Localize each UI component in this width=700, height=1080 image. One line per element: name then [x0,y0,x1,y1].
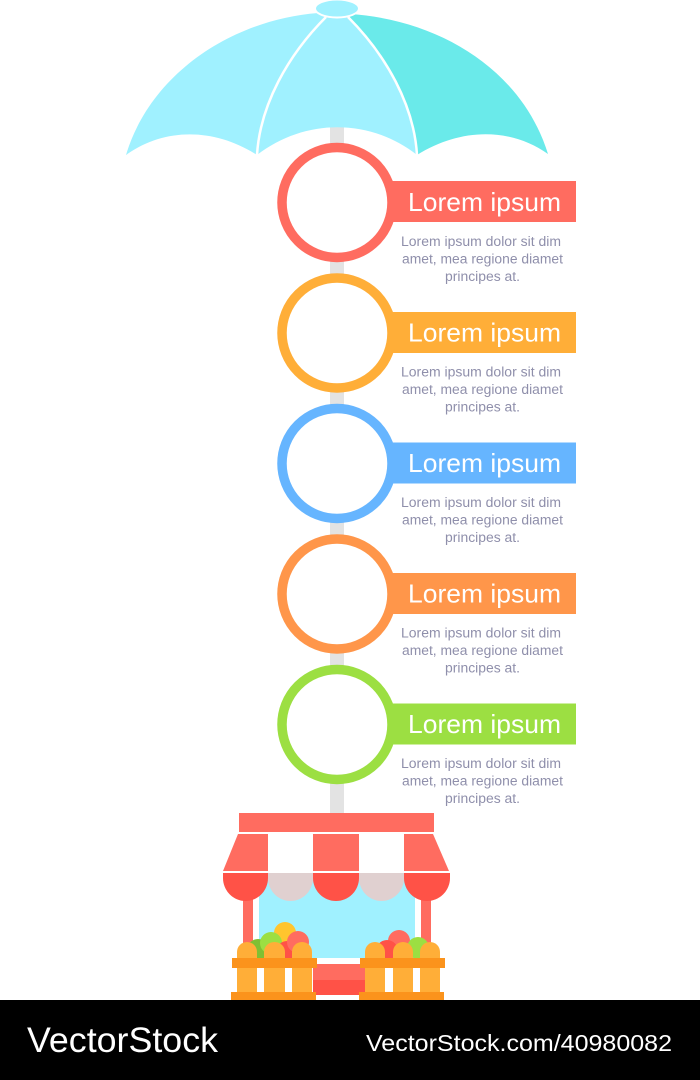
umbrella pole [330,125,344,815]
step 3 [282,408,576,545]
canopy left and middle panels [126,13,417,155]
canopy right panel [348,14,548,155]
canopy cap [315,0,359,18]
step 5 [282,670,576,806]
step 2 heading: Lorem ipsum [408,318,561,348]
step 4 description: principes at. [445,660,520,676]
step 3 description: amet, mea regione diamet [402,512,563,528]
step 2 description: amet, mea regione diamet [402,382,563,397]
step 1 description: amet, mea regione diamet [402,252,563,266]
step 3 description [401,495,563,545]
step 3 ring [282,408,392,518]
icon: market stall [223,813,450,1000]
left fruit pile [247,922,309,963]
step 4 ring [282,539,392,649]
step 2 banner [380,312,576,353]
step [313,964,365,995]
step 4 description: Lorem ipsum dolor sit dim [401,626,561,640]
step 1 ring [282,148,392,258]
step 1 description: Lorem ipsum dolor sit dim [401,234,561,249]
step 4 [282,539,576,676]
step 5 description: amet, mea regione diamet [402,774,563,788]
right fruit pile [376,930,429,962]
step 3 description: Lorem ipsum dolor sit dim [401,495,561,510]
step 5 heading: Lorem ipsum [408,709,561,739]
canopy left rib [257,17,326,155]
step 1 description [401,234,563,284]
step 2 [282,278,576,414]
step 1 description: principes at. [445,269,520,284]
step 2 description: Lorem ipsum dolor sit dim [401,364,561,380]
step 3 banner [380,442,576,484]
step 5 description: principes at. [445,791,520,806]
right fence [359,942,445,1000]
stall roof bar [239,813,434,832]
step 5 description [401,756,563,806]
step 4 heading: Lorem ipsum [408,578,561,608]
icon: umbrella canopy [126,0,548,155]
stall window [259,873,415,958]
step 2 description [401,364,563,414]
step 3 description: principes at. [445,530,520,545]
footer url text: VectorStock.com/40980082 [366,1030,672,1056]
step 1 [282,148,576,284]
step 1 banner [380,181,576,222]
canopy right rib [348,17,417,155]
step 2 ring [282,278,392,388]
step 2 description: principes at. [445,400,520,414]
step 5 banner [380,704,576,744]
step 4 description: amet, mea regione diamet [402,643,563,658]
step 5 description: Lorem ipsum dolor sit dim [401,756,561,771]
footer bar [0,1000,700,1080]
footer logo text: VectorStock [27,1021,219,1060]
step 1 heading: Lorem ipsum [408,187,561,217]
awning scallops [223,873,450,901]
step 4 banner [380,573,576,614]
stall posts [243,895,431,960]
step 4 description [401,626,563,676]
awning stripes [223,834,449,871]
left fence [231,942,317,1000]
step 3 heading: Lorem ipsum [408,448,561,478]
step 5 ring [282,670,392,780]
